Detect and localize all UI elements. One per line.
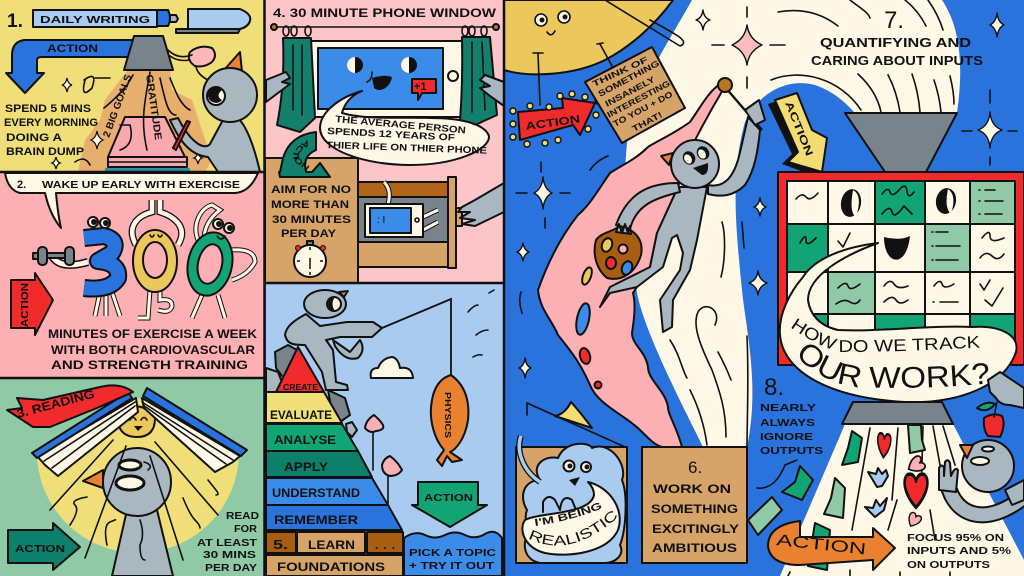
panel 1 instructions: [4, 103, 98, 158]
box: I'm being realistic: [515, 401, 628, 564]
reader bird: [83, 448, 173, 576]
step 8 text: [760, 374, 823, 457]
painter right arm: [708, 117, 760, 196]
tan box: AIM FOR NO: [271, 184, 352, 196]
heading bubble: 2.: [17, 179, 26, 191]
orange action arrow: ACTION: [776, 532, 867, 558]
painter left arm: [616, 183, 680, 229]
fishing bird: [285, 290, 451, 390]
curtains: [277, 37, 497, 132]
panel 4: phone window: [266, 0, 503, 282]
exercise caption: [48, 329, 258, 372]
step 7 heading: CARING ABOUT INPUTS: [811, 54, 983, 68]
sparkle stars: [516, 7, 1017, 378]
exercise caption: MINUTES OF EXERCISE A WEEK: [48, 329, 258, 341]
water with caption: + TRY IT OUT: [409, 560, 495, 572]
cloud: [371, 357, 413, 378]
speech bubble: how do we track our work: [779, 242, 1018, 401]
reading caption: AT LEAST: [197, 537, 258, 549]
pyramid of learning: ANALYSE: [274, 435, 336, 447]
exercise caption: WITH BOTH CARDIOVASCULAR: [51, 345, 256, 357]
focus text: FOCUS 95% ON: [907, 533, 1004, 544]
speech bubble: THE AVERAGE PERSON: [335, 114, 466, 136]
box: step 6: EXCITINGLY: [652, 522, 739, 536]
sun character: [504, 0, 684, 105]
phone window: [310, 41, 463, 117]
action sign with bulbs: ACTION: [525, 113, 581, 133]
red ribbon with heading: 3. READING: [15, 387, 96, 421]
curtain rod: [271, 24, 499, 36]
blue cloud character: [523, 444, 626, 563]
pen with label: DAILY WRITING: [40, 14, 150, 26]
tan box: [265, 158, 358, 283]
water with caption: PICK A TOPIC: [409, 547, 497, 559]
yellow action arrow: [768, 93, 827, 178]
pyramid of learning: UNDERSTAND: [272, 488, 360, 500]
tan box: PER DAY: [281, 228, 337, 240]
grid face eyes: [839, 186, 958, 260]
falling bills and hearts: [748, 425, 927, 570]
notebook: [105, 117, 190, 173]
focus text: ON OUTPUTS: [907, 560, 990, 571]
red ribbon with heading: [7, 385, 133, 427]
tan sign: think of something: [585, 47, 685, 143]
pyramid of learning: CREATE: [283, 383, 319, 392]
red action arrow: ACTION: [20, 283, 31, 327]
pyramid of learning: [266, 347, 403, 576]
pink paint river: [538, 84, 724, 447]
pyramid of learning: ...: [375, 540, 395, 552]
speech bubble: how do we track our work: OUR WORK?: [800, 344, 988, 388]
face under book: [118, 406, 155, 437]
box: step 6: [642, 447, 747, 563]
panel 3: reading: [0, 378, 264, 576]
grid cells: [787, 181, 1015, 344]
panel 1 instructions: BRAIN DUMP: [6, 146, 84, 158]
panel 1 instructions: DOING A: [6, 132, 62, 144]
paint drops: [520, 156, 608, 388]
hand holding rose: [988, 372, 1024, 408]
panel 1: daily writing: GRATITUDE: [143, 74, 163, 141]
pyramid of learning: LEARN: [308, 540, 355, 552]
birds in sky: [468, 290, 494, 357]
yellow number 0 character: [132, 200, 182, 318]
action sign with bulbs: [510, 91, 601, 147]
yellow light circle: [37, 398, 239, 553]
reading caption: [197, 510, 259, 574]
tan sign: think of something: INSANELY: [603, 74, 657, 109]
focus text: INPUTS AND 5%: [907, 546, 1011, 557]
rocks: [266, 345, 357, 437]
fish on hook: PHYSICS: [443, 392, 453, 438]
step 8 text: OUTPUTS: [760, 445, 823, 457]
green action arrow: [412, 482, 487, 527]
box: I'm being realistic: I'M BEING: [534, 503, 602, 526]
box: step 6: AMBITIOUS: [652, 541, 737, 555]
written words on beam: 2 BIG GOALS: [101, 73, 135, 139]
heading: 4. 30 MINUTE PHONE WINDOW: [273, 8, 496, 20]
curved green action arrow: [278, 131, 331, 178]
curved green action arrow: ACTION: [293, 140, 310, 170]
green number 0 character: [182, 205, 255, 318]
light rays and squiggles: [50, 440, 218, 560]
step 7 heading: [811, 7, 983, 68]
beam lines: [788, 426, 955, 576]
tan sign: think of something: SOMETHING: [596, 58, 661, 99]
panel 1: daily writing: [0, 0, 264, 173]
speech bubble: [522, 482, 620, 555]
flowers: [365, 415, 402, 505]
step 8 text: ALWAYS: [760, 417, 815, 429]
brush: [725, 87, 762, 130]
reading caption: FOR: [234, 523, 257, 535]
painter bird: [595, 78, 765, 332]
focus text: [907, 533, 1011, 571]
speech bubble: [320, 91, 489, 165]
exercise caption: AND STRENGTH TRAINING: [51, 360, 248, 372]
gardener bird with rose: [939, 372, 1024, 515]
reading caption: PER DAY: [205, 562, 257, 574]
orange action arrow: [768, 521, 895, 570]
step 7 heading: QUANTIFYING AND: [820, 36, 971, 50]
pyramid of learning: APPLY: [284, 462, 328, 474]
cream river: [625, 0, 960, 447]
pyramid of learning: REMEMBER: [274, 515, 359, 527]
water with caption: [404, 532, 502, 576]
panel 5: bloom's pyramid: [266, 283, 504, 576]
speech bubble: THIER LIFE ON THIER PHONE: [326, 140, 487, 157]
step number: 1.: [7, 11, 23, 32]
tan sign: think of something: INTERESTING: [605, 78, 672, 120]
speech bubble: how do we track our work: HOW DO WE TRACK: [791, 318, 980, 352]
blue number 3 character: [84, 217, 120, 316]
sparkles: [52, 78, 202, 169]
dark green action arrow: ACTION: [15, 543, 65, 555]
lamp: [124, 36, 173, 70]
roof line and hat: [527, 403, 625, 447]
box: I'm being realistic: REALISTIC: [529, 511, 617, 546]
rose: [984, 414, 1004, 437]
tan sign: think of something: THAT!: [630, 109, 664, 134]
light glow: [78, 70, 212, 172]
tan sign: think of something: THINK OF: [591, 54, 649, 89]
tan box: 30 MINUTES: [272, 214, 351, 226]
box: step 6: WORK ON: [653, 482, 731, 496]
small pink thought creature: [189, 47, 215, 66]
blue action arrow: [6, 40, 133, 93]
heading bubble: WAKE UP EARLY WITH EXERCISE: [42, 179, 240, 191]
red tracking board: [778, 172, 1024, 365]
sun ring: [605, 0, 684, 46]
panel 1 instructions: EVERY MORNING: [4, 117, 98, 129]
hands on curtains: [266, 72, 290, 102]
lamp beam lines: [75, 72, 190, 165]
pyramid of learning: 5.: [273, 537, 288, 552]
notification: +1: [414, 81, 427, 93]
green action arrow: ACTION: [424, 492, 473, 504]
writing bird: [170, 52, 260, 172]
output beam funnel: [780, 402, 1024, 576]
step 7 heading: 7.: [884, 7, 904, 34]
box: step 6: SOMETHING: [651, 502, 738, 516]
curve lines in cream river: [670, 0, 954, 447]
heading bubble: [5, 173, 258, 228]
open book on head: [32, 388, 247, 476]
yellow action arrow: ACTION: [782, 100, 815, 158]
funnel: [845, 113, 957, 172]
grid scribbles and checks: [796, 186, 1004, 306]
drawer with small phone: [358, 177, 504, 268]
box: step 6: 6.: [688, 458, 702, 477]
reading caption: 30 MINS: [203, 549, 256, 561]
notification: [412, 79, 436, 100]
palette: [595, 227, 642, 279]
panel border lines: [0, 0, 504, 576]
pyramid of learning: EVALUATE: [270, 410, 332, 422]
green bills: [842, 431, 862, 465]
tan sign: think of something: TO YOU + DO: [611, 89, 675, 129]
hand pulling drawer: [458, 183, 504, 226]
panel 1 instructions: SPEND 5 MINS: [5, 103, 91, 115]
fish on hook: [431, 375, 468, 466]
phone face: [347, 57, 363, 73]
dumbbell arm: [33, 247, 88, 265]
panel: big blue background: [504, 0, 1024, 576]
step 8 text: 8.: [764, 374, 784, 401]
pyramid of learning: FOUNDATIONS: [277, 562, 385, 574]
step 8 text: IGNORE: [760, 431, 813, 443]
step 8 text: NEARLY: [760, 402, 816, 414]
stopwatch: [294, 241, 326, 277]
speech bubble: SPENDS 12 YEARS OF: [327, 126, 455, 144]
drawer with small phone: : I: [377, 215, 385, 226]
hearts: [877, 433, 891, 458]
sun eyes and smile: [535, 11, 570, 35]
painter legs and body: [600, 187, 707, 332]
pen with label: [33, 9, 250, 33]
tan box: MORE THAN: [271, 199, 349, 211]
dark green action arrow: [8, 523, 80, 570]
blue action arrow: ACTION: [47, 43, 98, 55]
red action arrow: [11, 273, 53, 335]
panel 2: wake up early with exercise: [0, 172, 264, 378]
reading caption: READ: [226, 510, 259, 522]
